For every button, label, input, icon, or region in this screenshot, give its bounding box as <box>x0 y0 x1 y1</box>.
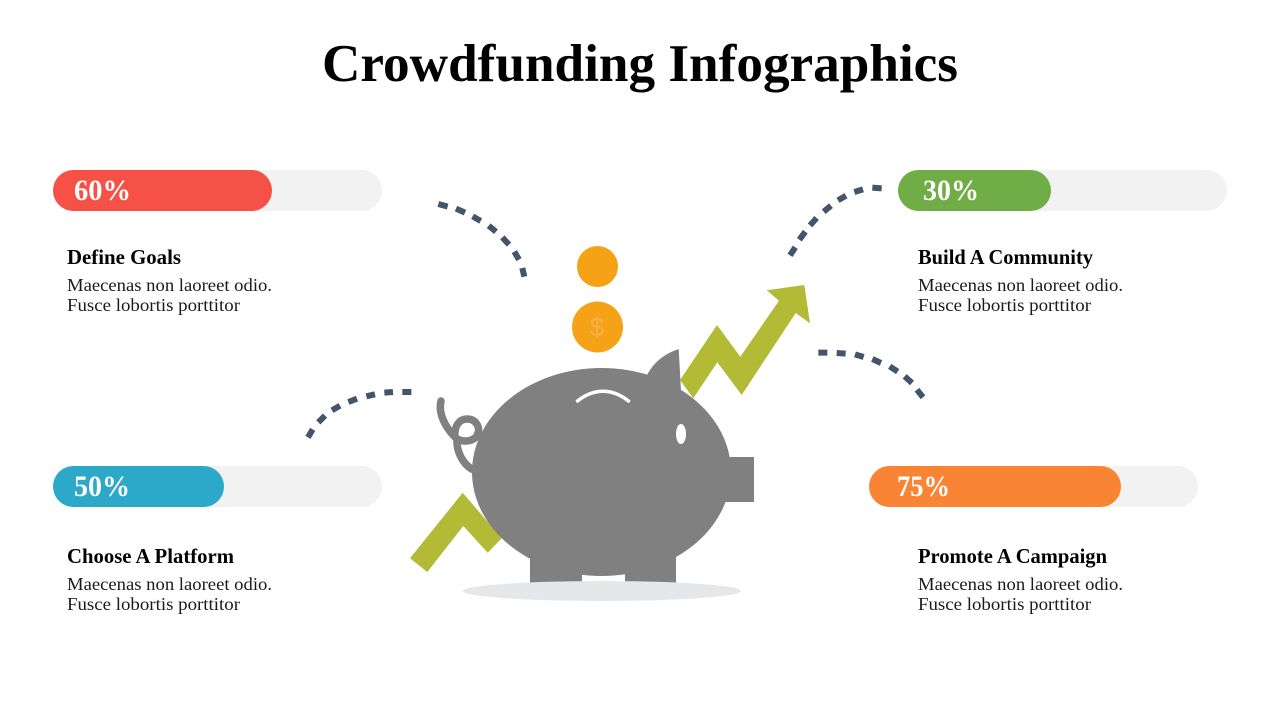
heading: promote a campaign: Promote A Campaign <box>918 544 1107 568</box>
text: define goals description <box>67 275 272 315</box>
text: build a community description: Fusce lobortis porttitor <box>918 295 1091 315</box>
pig body <box>472 368 731 576</box>
progress bar: 75% <box>869 466 1198 507</box>
dashed arc: build a community connector <box>790 188 882 255</box>
title: Crowdfunding Infographics <box>322 35 958 93</box>
progress bar: 50%: 50% <box>74 470 130 503</box>
shadow under piggy bank <box>463 581 741 601</box>
text: build a community description <box>918 275 1123 315</box>
pig ear <box>647 349 681 391</box>
text: promote a campaign description <box>918 574 1123 614</box>
progress bar: 30%: 30% <box>923 174 979 207</box>
heading: define goals: Define Goals <box>67 245 181 269</box>
text: define goals description: Fusce lobortis porttitor <box>67 295 240 315</box>
dashed arc: define goals connector <box>438 204 524 277</box>
icon: dollar coin <box>572 302 623 352</box>
pig tail <box>440 401 479 470</box>
progress bar: 75%: 75% <box>897 470 950 503</box>
heading: build a community: Build A Community <box>918 245 1093 269</box>
panel: choose a platform <box>53 466 382 614</box>
text: choose a platform description: Fusce lobortis porttitor <box>67 594 240 614</box>
text: define goals description: Maecenas non laoreet odio. <box>67 275 272 295</box>
heading: choose a platform: Choose A Platform <box>67 544 234 568</box>
progress bar: 60%: 60% <box>74 174 131 207</box>
coin slot <box>578 391 628 401</box>
dashed arc: choose a platform connector <box>308 392 411 437</box>
pig eye <box>676 424 686 444</box>
text: choose a platform description: Maecenas non laoreet odio. <box>67 574 272 594</box>
icon: falling coin <box>577 246 618 287</box>
icon: piggy bank <box>440 349 754 585</box>
panel: define goals <box>53 170 382 315</box>
text: choose a platform description <box>67 574 272 614</box>
arrow: rising trend <box>410 285 810 572</box>
dashed arc: promote a campaign connector <box>818 353 923 397</box>
progress bar: 50% <box>53 466 382 507</box>
icon: dollar coin: $ <box>590 312 605 342</box>
progress bar: 60% <box>53 170 382 211</box>
pig snout <box>722 457 754 502</box>
text: promote a campaign description: Maecenas non laoreet odio. <box>918 574 1123 594</box>
progress bar: 30% <box>898 170 1227 211</box>
panel: build a community <box>898 170 1227 315</box>
text: promote a campaign description: Fusce lobortis porttitor <box>918 594 1091 614</box>
panel: promote a campaign <box>869 466 1198 614</box>
pig legs <box>530 550 676 585</box>
text: build a community description: Maecenas non laoreet odio. <box>918 275 1123 295</box>
